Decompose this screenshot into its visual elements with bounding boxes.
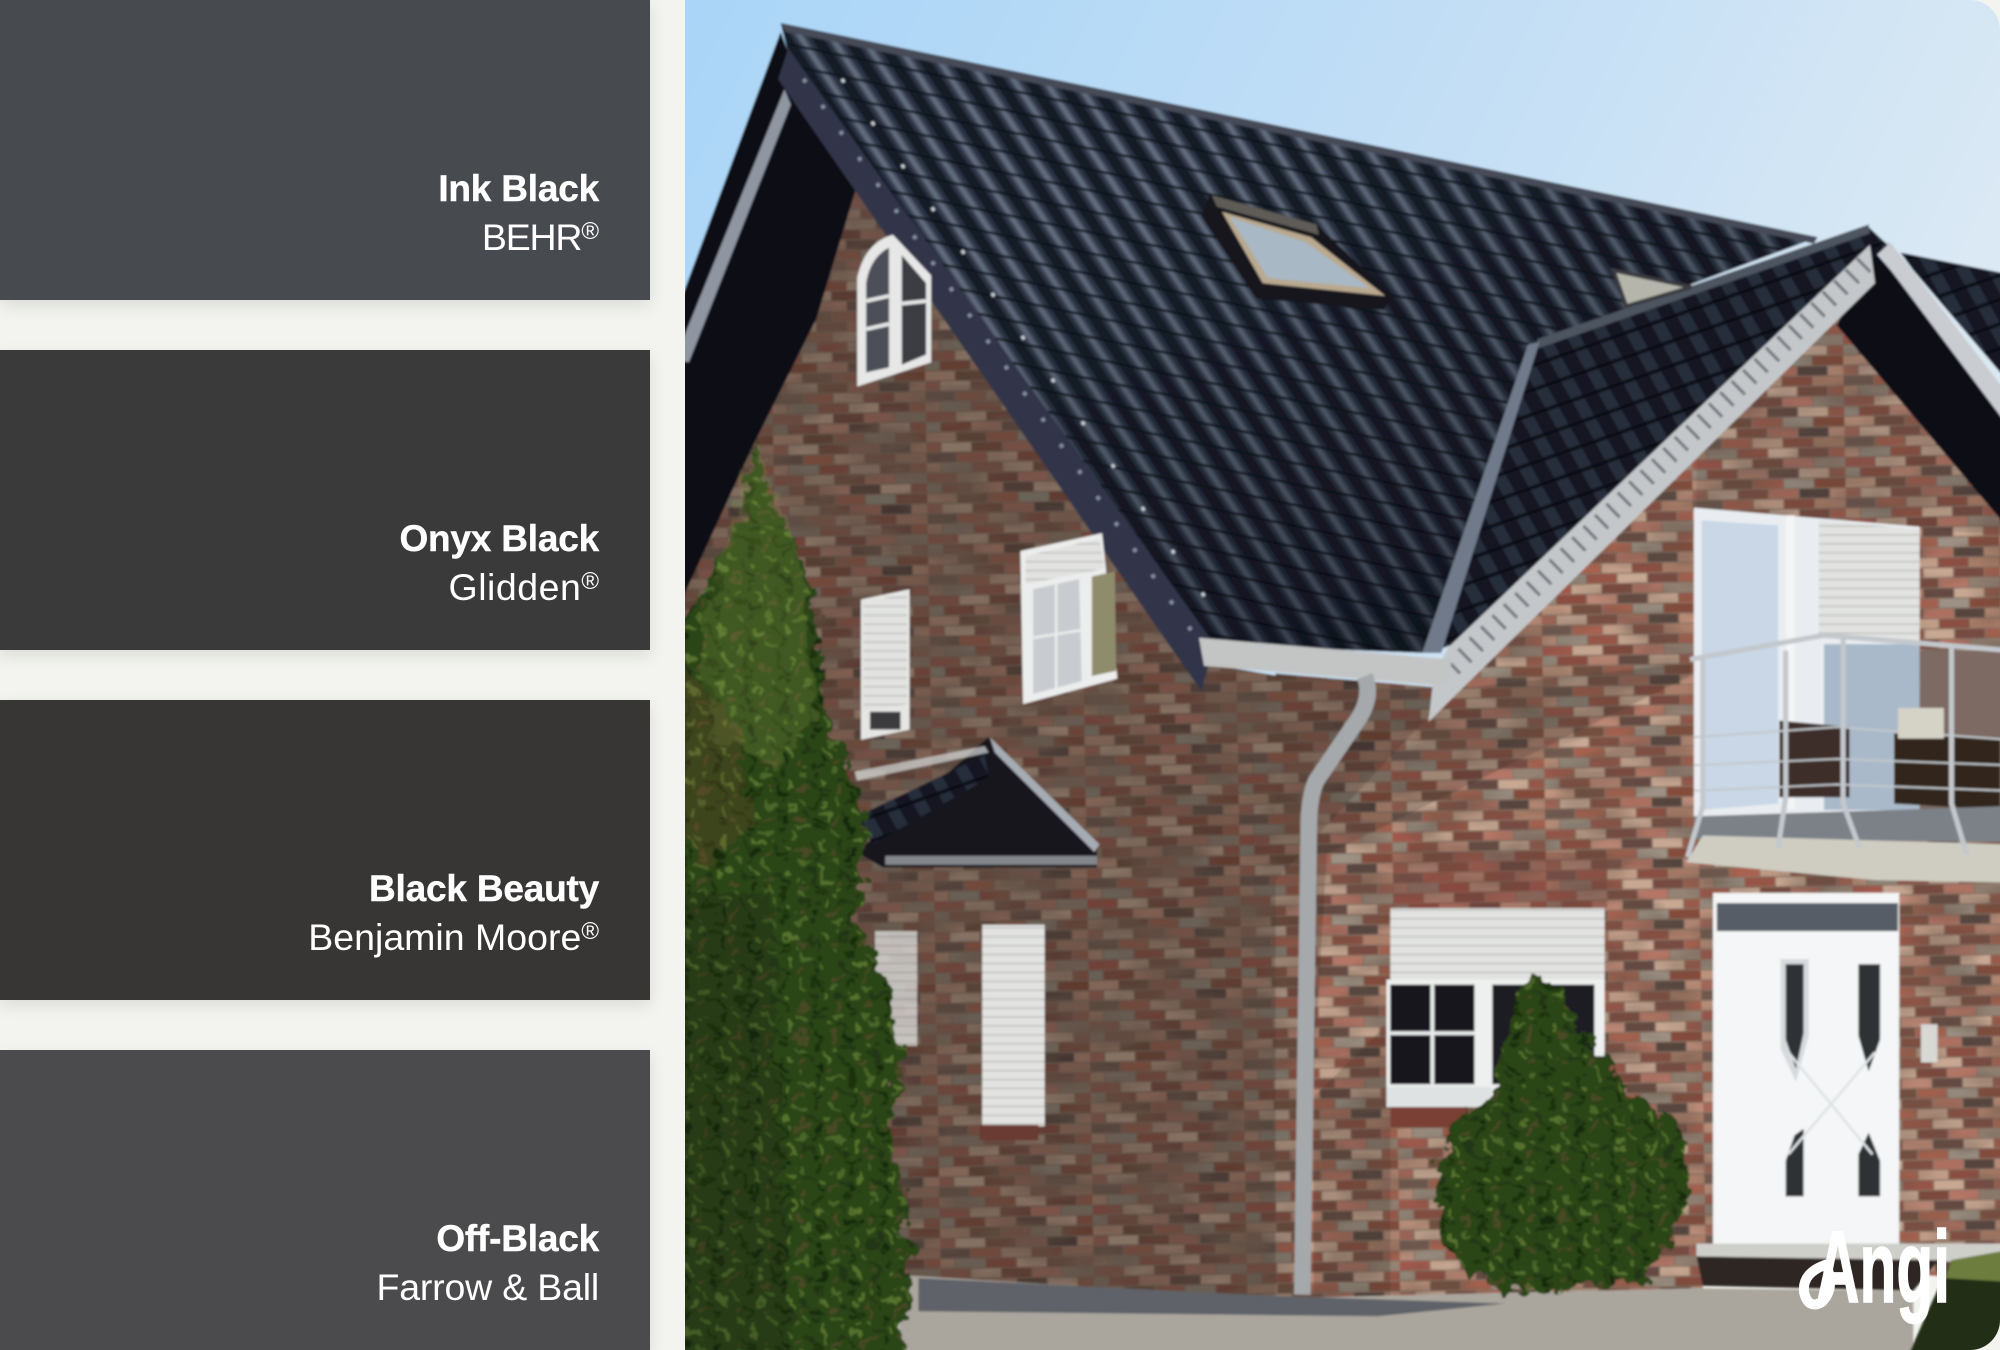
evergreen tree <box>666 435 911 1350</box>
colour name: Ink Black: Ink Black <box>438 168 599 209</box>
main tiled roof <box>778 23 1818 691</box>
left brick wall <box>676 179 1278 1349</box>
gutter <box>1199 638 1452 686</box>
second skylight <box>1614 270 1691 306</box>
door step <box>1696 1244 2000 1291</box>
arched attic window <box>857 235 931 386</box>
grey gable edge tiles <box>1429 245 1875 722</box>
right gable soffit and fascia <box>1837 242 2000 529</box>
upper window with shutter <box>1020 533 1117 704</box>
shrub <box>1434 974 1686 1293</box>
colour name: Off-Black: Off-Black <box>436 1218 599 1259</box>
right brick wall <box>1276 281 2000 1298</box>
panel: Off-Black swatch <box>0 1050 650 1350</box>
panel: house photo illustration <box>685 0 2000 1350</box>
left dark gable soffit <box>676 32 857 612</box>
front door <box>1713 893 1938 1245</box>
pavement <box>893 1275 1913 1350</box>
brand: Glidden: Glidden® <box>449 566 599 608</box>
panel: Black Beauty swatch <box>0 700 650 1000</box>
colour name: Black Beauty: Black Beauty <box>369 868 599 909</box>
downpipe <box>1302 676 1368 1295</box>
upper left shutter window <box>861 589 909 740</box>
colour name: Onyx Black: Onyx Black <box>399 518 599 559</box>
roof valley flashing <box>1422 342 1540 653</box>
front gable roof <box>1429 225 1888 653</box>
right far roof <box>1901 253 2000 383</box>
brand: Benjamin Moore: Benjamin Moore® <box>308 916 599 958</box>
balcony window upper <box>1694 508 2000 816</box>
brand: BEHR: BEHR® <box>482 216 599 258</box>
right hedge <box>1907 1250 2000 1350</box>
lower shutter windows <box>875 925 1045 1140</box>
balcony with railing and chairs <box>1686 635 2000 883</box>
panel: Ink Black swatch <box>0 0 650 300</box>
sky <box>676 0 2000 784</box>
panel: Onyx Black swatch <box>0 350 650 650</box>
Angi logo <box>1798 1220 1950 1324</box>
porch canopy roof <box>855 737 1100 867</box>
ground floor window <box>1387 908 1605 1128</box>
Angi logo loop swoosh <box>1804 1264 1830 1304</box>
brand: Farrow & Ball: Farrow & Ball <box>377 1266 599 1308</box>
skylight <box>1202 195 1392 310</box>
